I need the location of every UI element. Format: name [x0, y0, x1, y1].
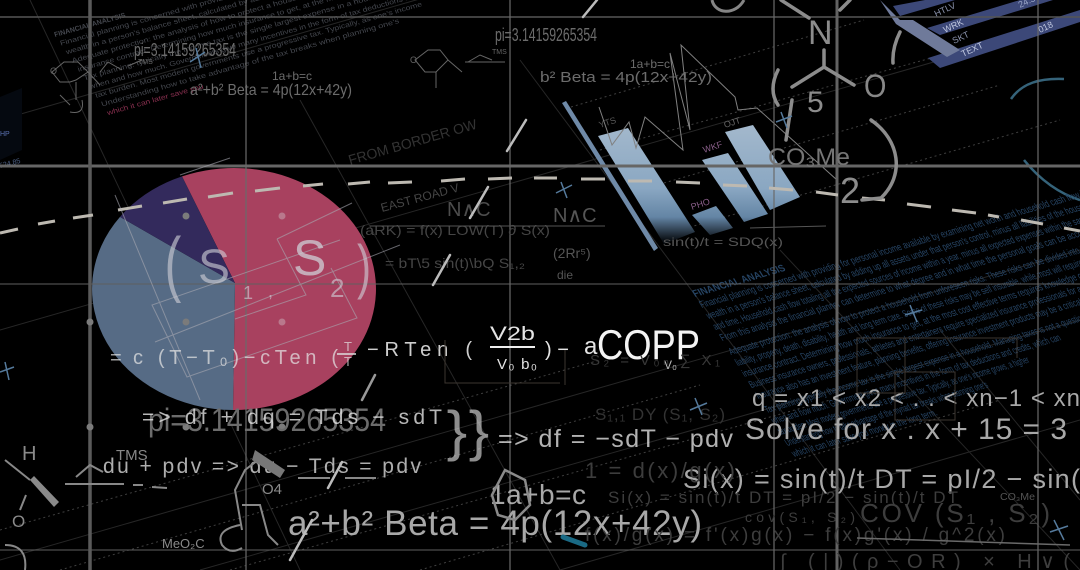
formula: free energy line: COPP	[597, 321, 700, 368]
hexagon ring near a+b=c	[492, 470, 530, 520]
paragraph: lower-right financial text	[690, 176, 1080, 460]
bar labels: WKF	[702, 139, 724, 155]
top-right table bands: TEXT	[960, 40, 985, 59]
formula: sine integral: Si(x) = sin(t)/t DT = pI/2 − sin(	[683, 464, 1080, 494]
formula: free energy line: V₀ b₀	[497, 356, 537, 373]
bar one	[598, 128, 695, 244]
bar labels	[598, 115, 742, 212]
zigzag trend line	[599, 45, 837, 180]
left edge blue panel: HP	[0, 131, 10, 138]
chart axis	[562, 101, 658, 251]
molecule: bottom left: TMS	[116, 447, 148, 464]
formula: large grey pi: pi=3.14159265354	[148, 402, 386, 438]
small molecule note lower right: CO₃Me	[1000, 492, 1035, 503]
strike line under formula	[857, 538, 1070, 545]
bar chart	[562, 45, 837, 251]
molecule: small top centre: TMS	[492, 49, 507, 56]
formula: pie labels S1 S2: 2	[330, 273, 344, 303]
bar labels: OJT	[723, 115, 742, 130]
faint handwritten notes centre: N∧C	[553, 205, 597, 227]
formula: free energy line: c (T−T₀)−cTen (	[133, 347, 338, 369]
molecule: bottom left: O	[12, 512, 25, 531]
formula: beta line: a²+b² Beta = 4p(12x+42y)	[288, 504, 702, 543]
bar four	[692, 206, 733, 235]
formula: quotient rule: f(x)/g(x) = f'(x)g(x) − f(x)g'(x) / g^2(x)	[585, 525, 1005, 546]
formula: a+b=c: 1a+b=c	[490, 479, 586, 510]
glowing blue smear	[563, 537, 585, 545]
formula: pie labels S1 S2: ,	[268, 281, 273, 301]
scattered slashes	[290, 0, 597, 560]
formula: faint sine integral: Si(x) = sin(t)/t DT = pI/2 − sin(t)/t DT	[608, 488, 958, 507]
arc gauge: right side	[1011, 79, 1080, 200]
pie chart	[92, 168, 376, 410]
slice: slate blue	[92, 217, 235, 410]
small pi formula left: pi=3.14159265354	[134, 40, 236, 60]
paragraph: lower-right financial text: which it can later save you money in the long term.	[789, 408, 940, 460]
faint handwritten notes centre: (aRK) = f(x) LOW(T) ∂ S(x)	[360, 222, 550, 238]
faint handwritten notes centre: FROM BORDER OW	[346, 116, 479, 168]
formula: free energy line: V2b	[490, 324, 535, 345]
formula: free energy line: ) −	[545, 339, 569, 361]
top-right table bands: SKT	[951, 29, 971, 46]
formula: pie labels S1 S2: S	[198, 241, 230, 294]
faint handwritten notes centre: = bT\5 sin(t)\bQ S₁,₂	[385, 255, 525, 271]
second small beta formula: b² Beta = 4p(12x+42y)	[540, 69, 712, 86]
formula: free energy line: V₀	[664, 358, 677, 372]
slice: red	[182, 168, 376, 410]
paragraph: top-left finance text	[53, 0, 485, 124]
bar two	[702, 153, 768, 222]
small a+b=c centre: 1a+b=c	[630, 57, 670, 71]
left edge blue panel	[0, 88, 22, 170]
formula: pie labels S1 S2	[164, 224, 371, 304]
molecule: large top right: 2	[840, 170, 860, 211]
paragraph: top-left finance text: which it can later save you	[105, 83, 205, 117]
molecule: small top left: TMS	[138, 59, 153, 66]
small a+b=c left: 1a+b=c	[272, 69, 312, 83]
tilted rectangles over pie	[115, 158, 400, 400]
bar labels: PHO	[690, 196, 711, 212]
faint cov formula: cov(S₁, S₂)	[745, 509, 855, 525]
molecule: large top right: O	[864, 69, 886, 104]
formula: du + pdv: du + pdv => du − Tds = pdv	[103, 455, 422, 478]
faint handwritten notes centre: S₁,₁ DY (S₁, S₂)	[595, 405, 725, 424]
formula: covariance: COV (S₁ , S₂)	[860, 498, 1050, 528]
top-right table bands: HTLV	[933, 0, 957, 19]
grid node dots	[86, 212, 286, 430]
faint handwritten notes centre: EAST ROAD V	[379, 181, 461, 215]
formula: pie labels S1 S2: )	[357, 233, 371, 300]
top-right table bands: WRK	[942, 17, 965, 35]
faint handwritten notes centre: die	[557, 268, 573, 282]
formula: free energy line: −RTen (	[367, 339, 472, 361]
molecule: large top right: 5	[807, 86, 824, 119]
paragraph: top-left finance text: when and how much. Governments give many incentives in the form of tax deductions and credits	[88, 0, 447, 91]
bar three	[725, 125, 800, 210]
slice: dark purple	[120, 176, 235, 283]
paragraph: top-left finance text: tax burden. Most modern governments use a progressive tax. Typically, as one's income	[95, 1, 423, 100]
bar labels: YTS	[598, 115, 617, 130]
formula: ordered sequence: q = x1 < x2 < . . < xn−1 < xn	[752, 385, 1080, 412]
faint handwritten notes centre	[346, 116, 826, 424]
wireframe boxes lower right	[445, 338, 1017, 420]
faint handwritten notes centre: sin(t)/t = SDQ(x)	[663, 235, 783, 249]
formula: free energy line: T	[344, 354, 352, 369]
molecule: small top left: O	[50, 66, 57, 76]
molecule: small top centre	[410, 49, 507, 88]
faint handwritten notes centre: (2Rr⁵)	[553, 245, 591, 261]
paragraph: lower-right financial text: FINANCIAL ANALYSIS	[690, 263, 788, 300]
molecule: bottom left	[5, 443, 376, 570]
braces	[447, 401, 489, 462]
molecule: small top left	[50, 59, 153, 112]
formula: free energy line: T	[344, 339, 352, 354]
faint handwritten notes centre: N∧C	[447, 199, 491, 221]
molecule: bottom left: O4	[262, 481, 282, 498]
formula: free energy line	[110, 321, 700, 373]
molecule: bottom left: H	[22, 443, 36, 465]
molecule: large top right: N	[808, 14, 833, 52]
formula: free energy line: =	[110, 347, 122, 369]
small pi formula centre: pi=3.14159265354	[495, 25, 597, 45]
formula: solve for x: Solve for x . x + 15 = 3	[745, 413, 1067, 446]
formula: pie labels S1 S2: (	[164, 224, 182, 304]
molecule: small top centre: O	[410, 55, 417, 65]
top-right table bands: 018	[1037, 19, 1054, 35]
formula: df + dq: => df + dq = Tds − sdT	[142, 406, 442, 429]
paragraph: top-left finance text: FINANCIAL ANALYSIS	[53, 12, 127, 39]
formula: pie labels S1 S2: 1	[243, 283, 253, 303]
molecule: bottom left: MeO₂C	[162, 536, 205, 551]
formula: df = -sdT - pdv: => df = −sdT − pdv	[498, 425, 734, 453]
formula: faint d(x)/g(x): 1 = d(x)/g(x)	[585, 458, 735, 483]
top-right table bands	[880, 0, 1080, 68]
braces: }	[447, 401, 467, 462]
molecule: large top right	[712, 0, 900, 211]
molecule: large top right: CO₃Me	[768, 144, 850, 171]
braces: }	[469, 401, 489, 462]
small beta formula: a²+b² Beta = 4p(12x+42y)	[190, 82, 352, 99]
formula: free energy line: a	[584, 333, 598, 360]
formula: pie labels S1 S2: S	[293, 230, 326, 286]
faint handwritten notes centre: S₂ = V₀ₙ ∑ X₁	[590, 352, 720, 369]
dashed arc line	[0, 178, 1080, 233]
paragraph: top-left finance text: Understanding how to take advantage of the tax breaks when planning one's	[101, 18, 401, 108]
